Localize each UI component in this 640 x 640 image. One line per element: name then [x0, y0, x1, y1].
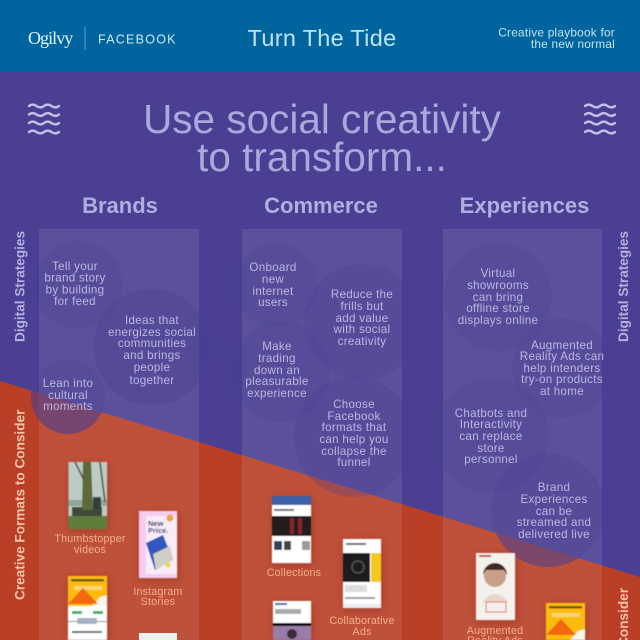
side label: creative formats left: Creative Formats to Consider — [12, 409, 28, 600]
format: instagram stories: New — [148, 519, 164, 528]
strategy: augmented reality: Augmented — [531, 339, 593, 352]
header band — [0, 0, 640, 72]
strategy: chatbots: personnel — [464, 453, 518, 466]
strategy: onboard: Onboard — [249, 261, 297, 274]
strategy: augmented reality: Reality Ads can — [520, 350, 604, 363]
panel: experiences — [434, 229, 612, 640]
strategy: choose formats: funnel — [337, 456, 371, 469]
Facebook logo: FACEBOOK — [98, 32, 177, 46]
icon: waves left — [29, 105, 59, 133]
strategy: choose formats: can help you — [319, 433, 389, 446]
strategy: chatbots: Interactivity — [460, 418, 522, 431]
strategy: trading down: trading — [258, 352, 296, 365]
strategy: brand story: Tell your — [52, 260, 98, 273]
column background — [242, 229, 402, 640]
format: augmented reality ad — [476, 553, 515, 620]
strategy: social communities: energizes social — [108, 326, 196, 339]
strategy: virtual showrooms: displays online — [458, 314, 538, 327]
strategy: choose formats: collapse the — [321, 445, 387, 458]
format: fourth phone — [139, 633, 177, 640]
Ogilvy logo: Ogilvy — [28, 28, 73, 48]
strategy: social communities: communities — [118, 337, 186, 350]
strategy: brand experiences: Experiences — [520, 493, 588, 506]
header subtitle: Creative playbook for — [498, 26, 615, 40]
strategy: social communities: Ideas that — [125, 314, 179, 327]
column headings: Commerce — [264, 193, 378, 218]
caption: thumbstopper: videos — [74, 544, 106, 556]
format: third commerce phone — [273, 601, 311, 640]
strategy: augmented reality: try-on products — [521, 373, 603, 386]
format: instagram stories — [139, 511, 177, 578]
strategy: social communities: and brings — [123, 349, 181, 362]
strategy: trading down: Make — [262, 340, 292, 353]
strategy: brand experiences: delivered live — [518, 528, 590, 541]
strategy: brand story: for feed — [54, 295, 96, 308]
strategy: choose formats: formats that — [322, 421, 387, 434]
strategy: brand story: brand story — [44, 272, 106, 284]
format: playable ad phone — [546, 603, 585, 640]
header title: Turn The Tide — [248, 25, 396, 51]
strategy: cultural moments: Lean into — [43, 377, 93, 390]
format: collaborative ads — [343, 539, 381, 608]
strategy: brand story: by building — [46, 283, 104, 296]
strategy: choose formats: Facebook — [327, 410, 381, 423]
caption: thumbstopper: Thumbstopper — [54, 533, 126, 545]
strategy: brand experiences: can be — [536, 505, 572, 518]
caption: collaborative ads: Ads — [352, 626, 372, 638]
strategy: choose formats: Choose — [333, 398, 375, 411]
strategy: cultural moments: moments — [43, 400, 93, 413]
circle backdrops — [31, 300, 118, 434]
strategy: chatbots: can replace — [459, 430, 523, 443]
strategy: brand experiences: streamed and — [517, 516, 591, 529]
strategy: social communities: people — [134, 361, 170, 374]
circle backdrops — [496, 532, 578, 567]
strategy: chatbots: store — [477, 442, 505, 455]
strategy: chatbots: Chatbots and — [455, 407, 527, 420]
strategy: cultural moments: cultural — [48, 389, 88, 402]
format: instagram stories: Price. — [148, 526, 168, 535]
column headings: Experiences — [460, 193, 589, 218]
circle backdrops — [230, 243, 420, 497]
caption: instagram stories: Instagram — [133, 586, 183, 598]
side label: digital strategies right: Digital Strategies — [616, 231, 631, 342]
header subtitle: the new normal — [531, 37, 615, 51]
strategy: augmented reality: help intenders — [523, 362, 601, 375]
column background — [39, 229, 199, 640]
strategy: reduce frills: frills but — [341, 300, 384, 313]
strategy: virtual showrooms: Virtual — [481, 267, 515, 280]
caption: collaborative ads: Collaborative — [330, 615, 394, 627]
column headings: Brands — [82, 193, 158, 218]
strategy: virtual showrooms: can bring — [473, 291, 523, 304]
strategy: reduce frills: with social — [333, 323, 390, 336]
icon: waves right — [585, 105, 615, 133]
side label: digital strategies left: Digital Strategies — [12, 231, 28, 342]
strategy: onboard: new — [262, 273, 284, 286]
strategy: onboard: internet — [252, 285, 294, 298]
strategy: augmented reality: at home — [540, 385, 584, 398]
strategy: reduce frills: add value — [336, 312, 388, 325]
strategy: trading down: pleasurable — [245, 375, 309, 388]
caption: augmented reality ads: Augmented — [467, 625, 523, 637]
column background — [443, 229, 602, 640]
strategy: reduce frills: creativity — [338, 335, 386, 348]
strategy: brand experiences: Brand — [538, 481, 570, 494]
format: thumbstopper video — [68, 462, 107, 529]
column headings — [82, 193, 589, 218]
caption: instagram stories: Stories — [141, 596, 175, 608]
panel: commerce — [230, 229, 420, 640]
strategy: social communities: together — [130, 374, 174, 387]
strategy: trading down: experience — [247, 387, 307, 400]
caption: collections: Collections — [267, 567, 321, 579]
strategy: virtual showrooms: showrooms — [467, 279, 529, 292]
format: collections — [272, 496, 311, 563]
strategy: trading down: down an — [254, 364, 300, 377]
panel: brands — [31, 229, 210, 640]
strategy: onboard: users — [258, 296, 288, 309]
main heading: Use social creativity — [143, 96, 502, 142]
orange tide background — [0, 381, 640, 640]
format: playable ad phone — [68, 576, 107, 640]
strategy: reduce frills: Reduce the — [331, 288, 393, 301]
strategy: virtual showrooms: offline store — [466, 302, 530, 315]
logo divider — [84, 27, 86, 50]
main heading: to transform... — [197, 134, 447, 180]
